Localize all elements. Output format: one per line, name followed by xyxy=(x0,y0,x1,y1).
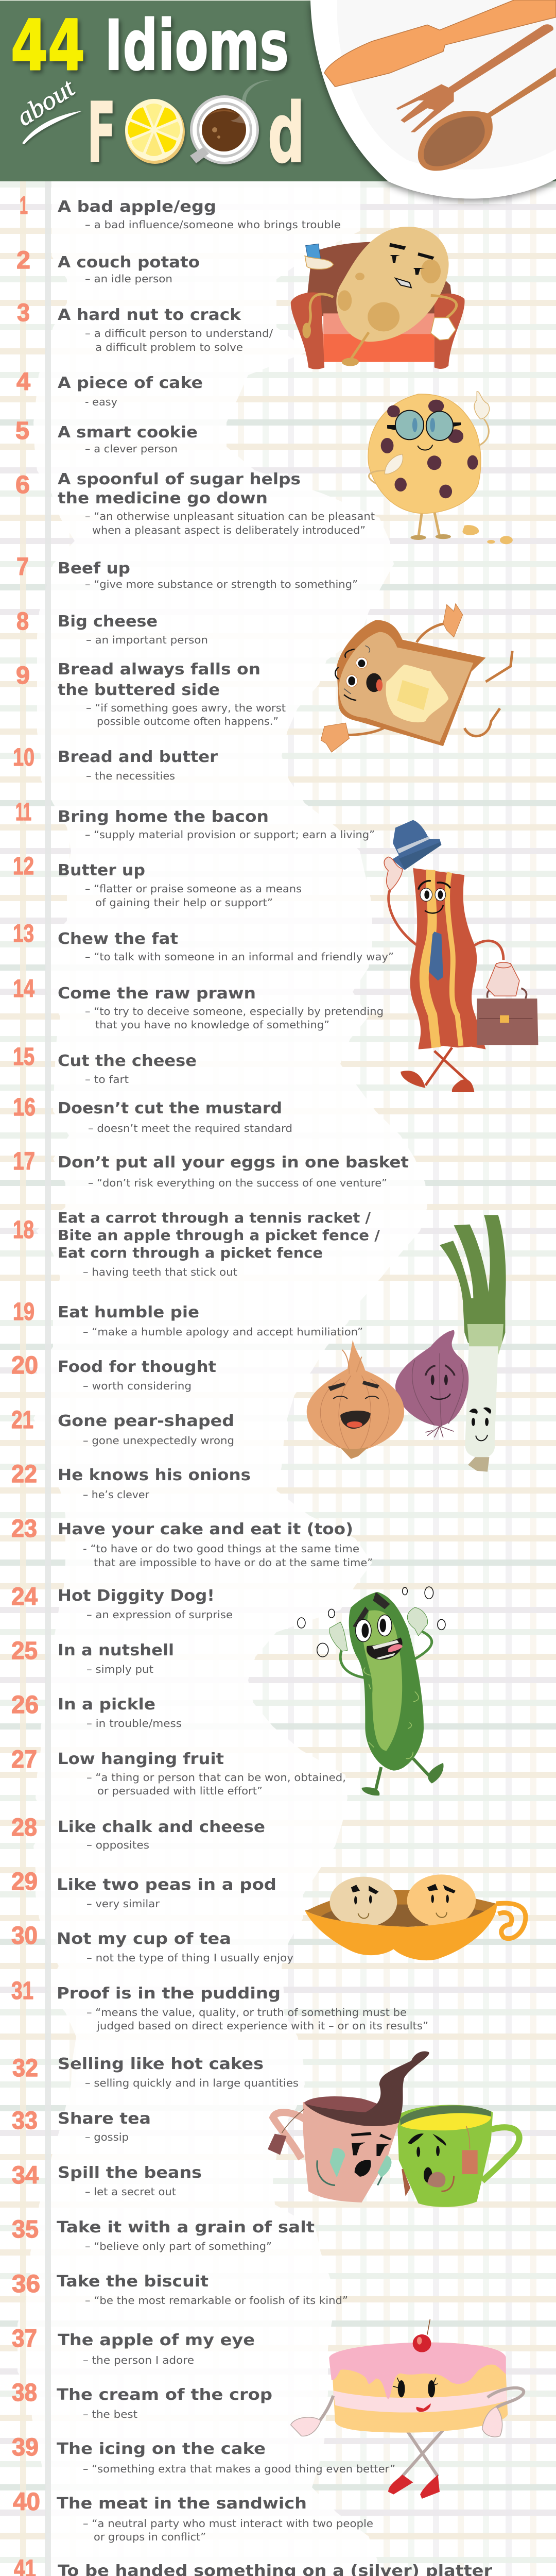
idiom 25: 25 xyxy=(11,1637,38,1665)
idiom 10: 10 xyxy=(13,744,34,771)
idiom 30: – not the type of thing I usually enjoy xyxy=(86,1952,293,1964)
idiom 26: – in trouble/mess xyxy=(86,1717,182,1730)
idiom 36: – “be the most remarkable or foolish of its kind” xyxy=(85,2294,348,2307)
idiom 13: Chew the fat xyxy=(58,930,178,948)
idiom 5: – a clever person xyxy=(85,443,178,455)
idiom 38: The cream of the crop xyxy=(57,2386,272,2404)
idiom 40: – “a neutral party who must interact with two people xyxy=(83,2517,373,2530)
idiom 9: 9 xyxy=(16,662,30,689)
idiom 11: 11 xyxy=(15,799,31,826)
idiom 20 xyxy=(11,1352,216,1392)
idiom 38: – the best xyxy=(83,2408,137,2420)
idiom 10: – the necessities xyxy=(86,770,175,782)
idiom 17: – “don’t risk everything on the success of one venture” xyxy=(88,1177,387,1189)
idiom 3: a difficult problem to solve xyxy=(95,341,243,353)
idiom 6: A spoonful of sugar helps xyxy=(58,470,301,488)
idiom 9: – “if something goes awry, the worst xyxy=(86,702,286,714)
idiom 26 xyxy=(11,1691,182,1730)
idiom 35: 35 xyxy=(12,2216,39,2243)
idiom 27: or persuaded with little effort” xyxy=(97,1785,263,1797)
idiom 15 xyxy=(13,1043,197,1086)
title: 44 Idioms xyxy=(11,5,289,86)
idiom 38: 38 xyxy=(12,2379,37,2406)
idiom 8 xyxy=(16,608,208,646)
idiom 12 xyxy=(13,853,302,909)
idiom 28: 28 xyxy=(11,1814,37,1841)
idiom 38 xyxy=(12,2379,272,2420)
illustration: gossiping tea mugs xyxy=(268,2051,519,2207)
idiom 33: – gossip xyxy=(85,2131,129,2143)
idiom 37: – the person I adore xyxy=(83,2354,194,2366)
red onion xyxy=(395,1330,468,1437)
idiom 40: 40 xyxy=(13,2488,40,2516)
idiom 23 xyxy=(11,1515,373,1569)
idiom 19: Eat humble pie xyxy=(58,1303,199,1321)
idiom 5 xyxy=(15,417,198,455)
illustration: couch potato xyxy=(291,227,464,369)
idiom 33: 33 xyxy=(12,2107,38,2134)
idiom 34: – let a secret out xyxy=(85,2185,176,2198)
idiom 35: – “believe only part of something” xyxy=(85,2240,272,2252)
idiom 25: In a nutshell xyxy=(58,1641,174,1659)
idiom 30: Not my cup of tea xyxy=(57,1930,231,1948)
idiom 31: judged based on direct experience with it – or on its results” xyxy=(96,2020,428,2032)
idiom 15: Cut the cheese xyxy=(58,1052,197,1070)
idiom 12: Butter up xyxy=(58,861,145,879)
idiom 37: 37 xyxy=(12,2325,37,2352)
idiom 14: that you have no knowledge of something” xyxy=(95,1019,329,1031)
idiom 21 xyxy=(11,1406,234,1447)
idiom 41 xyxy=(14,2555,492,2576)
idiom 22: – he’s clever xyxy=(83,1488,150,1501)
idiom 14: 14 xyxy=(13,975,34,1003)
idiom 14: – “to try to deceive someone, especially by pretending xyxy=(85,1005,384,1018)
idiom 17: Don’t put all your eggs in one basket xyxy=(58,1154,409,1172)
idiom 16: 16 xyxy=(13,1094,36,1121)
idiom 29: 29 xyxy=(11,1868,38,1895)
idiom 12: – “flatter or praise someone as a means xyxy=(85,883,302,895)
idiom 22: 22 xyxy=(11,1461,37,1488)
idiom 15: – to fart xyxy=(85,1073,129,1086)
idiom 5: 5 xyxy=(15,417,29,445)
idiom 37 xyxy=(12,2325,255,2366)
idiom 14: Come the raw prawn xyxy=(58,985,256,1003)
idiom 25: – simply put xyxy=(86,1663,153,1675)
illustration: cake with cherry xyxy=(291,2319,524,2499)
idiom 3 xyxy=(17,299,273,353)
title: Food: F xyxy=(87,84,116,181)
idiom 4: - easy xyxy=(85,396,117,408)
idiom 16: – doesn’t meet the required standard xyxy=(88,1122,292,1134)
idiom 18: – having teeth that stick out xyxy=(83,1266,237,1278)
icon: coffee cup xyxy=(190,95,259,164)
header banner xyxy=(0,0,556,199)
idiom 32: – selling quickly and in large quantities xyxy=(85,2077,299,2089)
title: 44 Idioms: 44 xyxy=(11,5,85,86)
idiom 24: Hot Diggity Dog! xyxy=(58,1587,215,1605)
idiom 21: Gone pear-shaped xyxy=(58,1412,234,1430)
idiom 10: Bread and butter xyxy=(58,748,218,766)
idiom 6: 6 xyxy=(15,471,30,499)
idiom 37: The apple of my eye xyxy=(58,2331,255,2349)
idiom 31 xyxy=(11,1977,428,2032)
idiom 16 xyxy=(13,1094,292,1134)
idiom 34: Spill the beans xyxy=(58,2164,202,2182)
title: about: about xyxy=(11,73,80,131)
idiom 33 xyxy=(12,2107,151,2143)
idiom 19: – “make a humble apology and accept humiliation” xyxy=(83,1326,363,1338)
idiom 3: 3 xyxy=(17,299,30,327)
title: Food: d xyxy=(268,85,305,181)
illustration: onions xyxy=(307,1330,468,1459)
idiom 25 xyxy=(11,1637,174,1675)
idiom 2 xyxy=(16,247,200,285)
idiom 29 xyxy=(11,1868,276,1910)
idiom 24: 24 xyxy=(11,1583,38,1611)
idiom 7: – “give more substance or strength to something” xyxy=(85,578,358,590)
idiom 27: Low hanging fruit xyxy=(58,1750,224,1768)
idiom 13: – “to talk with someone in an informal and friendly way” xyxy=(85,951,394,963)
idiom 12: of gaining their help or support” xyxy=(95,896,273,909)
idiom 2: 2 xyxy=(16,247,30,274)
idiom 20: Food for thought xyxy=(58,1358,216,1376)
icon: knife xyxy=(324,0,556,87)
idiom 34: 34 xyxy=(12,2162,39,2189)
title: 44 Idioms: Idioms xyxy=(105,5,289,86)
idiom 32: Selling like hot cakes xyxy=(58,2055,264,2073)
idiom 23: 23 xyxy=(11,1515,37,1543)
idiom 31: 31 xyxy=(11,1977,33,2005)
idiom 36 xyxy=(12,2270,348,2307)
icon: spoon xyxy=(418,68,556,171)
idiom 2: – an idle person xyxy=(85,273,172,285)
idiom 39: – “something extra that makes a good thing even better” xyxy=(83,2463,395,2475)
idiom 6 xyxy=(15,470,375,536)
idiom 9: Bread always falls on xyxy=(58,660,260,679)
idiom 11 xyxy=(15,799,375,841)
idiom 22: He knows his onions xyxy=(58,1466,251,1484)
icon: steam xyxy=(231,80,273,126)
illustration: bacon with hat and briefcase xyxy=(384,820,538,1092)
idiom 28: – opposites xyxy=(86,1839,149,1851)
idiom 12: 12 xyxy=(13,853,34,880)
idiom 32: 32 xyxy=(12,2055,38,2082)
idiom 28: Like chalk and cheese xyxy=(58,1818,265,1836)
idiom 4: A piece of cake xyxy=(58,374,203,392)
illustration: pickle xyxy=(298,1587,445,1795)
idiom 22 xyxy=(11,1461,251,1501)
idiom 1: – a bad influence/someone who brings trouble xyxy=(85,218,341,231)
idiom 31: Proof is in the pudding xyxy=(57,1985,281,2003)
idiom 29: – very similar xyxy=(86,1897,160,1910)
idiom 34 xyxy=(12,2162,202,2198)
idiom 24 xyxy=(11,1583,233,1621)
idiom 3: A hard nut to crack xyxy=(58,306,241,324)
idiom 5: A smart cookie xyxy=(58,423,198,442)
idiom 16: Doesn’t cut the mustard xyxy=(58,1099,282,1117)
idiom 39: The icing on the cake xyxy=(57,2440,266,2458)
idiom 10 xyxy=(13,744,218,782)
idiom 6: – “an otherwise unpleasant situation can be pleasant xyxy=(85,510,375,522)
idiom 40: or groups in conflict” xyxy=(94,2531,206,2543)
idiom 11: – “supply material provision or support; earn a living” xyxy=(85,828,375,841)
idiom 27: 27 xyxy=(11,1746,37,1773)
idiom 23: that are impossible to have or do at the same time” xyxy=(94,1556,373,1569)
idiom 39: 39 xyxy=(12,2434,39,2461)
idiom 26: In a pickle xyxy=(58,1696,155,1714)
idiom 21: 21 xyxy=(11,1406,33,1434)
idiom 29: Like two peas in a pod xyxy=(57,1876,276,1894)
idiom 18: 18 xyxy=(13,1216,34,1244)
idiom 9: the buttered side xyxy=(58,681,220,699)
idiom 23: Have your cake and eat it (too) xyxy=(58,1520,353,1538)
idiom 35 xyxy=(12,2216,315,2252)
plate with cutlery xyxy=(310,0,556,199)
idiom 13 xyxy=(13,920,394,963)
illustration: buttered toast xyxy=(321,604,512,752)
green mug xyxy=(397,2105,519,2207)
icon: lemon slice xyxy=(125,99,185,164)
icon: fork xyxy=(396,24,553,132)
idiom 18: Bite an apple through a picket fence / xyxy=(58,1227,380,1244)
idiom 31: – “means the value, quality, or truth of something must be xyxy=(86,2006,407,2019)
idiom 23: - “to have or do two good things at the same time xyxy=(83,1543,359,1555)
idiom 15: 15 xyxy=(13,1043,34,1071)
title: Food xyxy=(87,80,305,181)
idiom 40 xyxy=(13,2488,373,2543)
idiom 32 xyxy=(12,2055,299,2089)
idiom 9: possible outcome often happens.” xyxy=(97,715,279,727)
idiom 4: 4 xyxy=(16,368,30,396)
idiom 39 xyxy=(12,2434,395,2475)
idiom 9 xyxy=(16,660,286,727)
pink mug xyxy=(268,2051,429,2202)
idiom 35: Take it with a grain of salt xyxy=(57,2218,315,2236)
idiom 21: – gone unexpectedly wrong xyxy=(83,1434,234,1447)
idiom 19 xyxy=(13,1298,363,1338)
idiom 18 xyxy=(13,1209,380,1278)
idiom 6: when a pleasant aspect is deliberately introduced” xyxy=(92,524,366,536)
idiom 40: The meat in the sandwich xyxy=(57,2495,307,2513)
yellow onion xyxy=(307,1340,404,1459)
idiom 28 xyxy=(11,1814,265,1851)
idiom 1: 1 xyxy=(20,192,28,219)
idiom 7: 7 xyxy=(16,553,29,581)
idiom 13: 13 xyxy=(13,920,34,947)
idiom 19: 19 xyxy=(13,1298,34,1326)
illustration: spring onion xyxy=(440,1215,506,1472)
idiom 18: Eat a carrot through a tennis racket / xyxy=(58,1209,371,1226)
idiom 3: – a difficult person to understand/ xyxy=(85,327,273,340)
idiom 36: 36 xyxy=(12,2270,40,2298)
idiom 11: Bring home the bacon xyxy=(58,808,269,826)
idiom 1 xyxy=(20,192,341,231)
illustration: smart cookie xyxy=(368,392,513,544)
idiom 14 xyxy=(13,975,384,1031)
idiom 18: Eat corn through a picket fence xyxy=(58,1244,323,1261)
idiom 24: – an expression of surprise xyxy=(86,1608,233,1621)
idiom 8: Big cheese xyxy=(58,613,158,631)
illustration: two peas in a tea cup xyxy=(305,1874,526,1960)
idiom 6: the medicine go down xyxy=(58,489,268,507)
idiom 17: 17 xyxy=(13,1148,35,1175)
idiom 20: 20 xyxy=(11,1352,38,1379)
idiom 8: – an important person xyxy=(86,634,208,646)
idiom 30 xyxy=(11,1922,293,1964)
idiom 27 xyxy=(11,1746,346,1797)
idiom 27: – “a thing or person that can be won, obtained, xyxy=(86,1771,346,1784)
idiom 26: 26 xyxy=(11,1691,39,1719)
idiom 7 xyxy=(16,553,358,590)
idiom 17 xyxy=(13,1148,409,1189)
idiom 8: 8 xyxy=(16,608,29,635)
idiom 4 xyxy=(16,368,203,408)
idiom 2: A couch potato xyxy=(58,253,200,272)
idiom 36: Take the biscuit xyxy=(57,2273,208,2291)
idiom 7: Beef up xyxy=(58,560,130,578)
idiom 20: – worth considering xyxy=(83,1380,192,1392)
idiom 1: A bad apple/egg xyxy=(58,198,216,216)
idiom 33: Share tea xyxy=(58,2110,151,2128)
idiom 30: 30 xyxy=(11,1922,38,1950)
